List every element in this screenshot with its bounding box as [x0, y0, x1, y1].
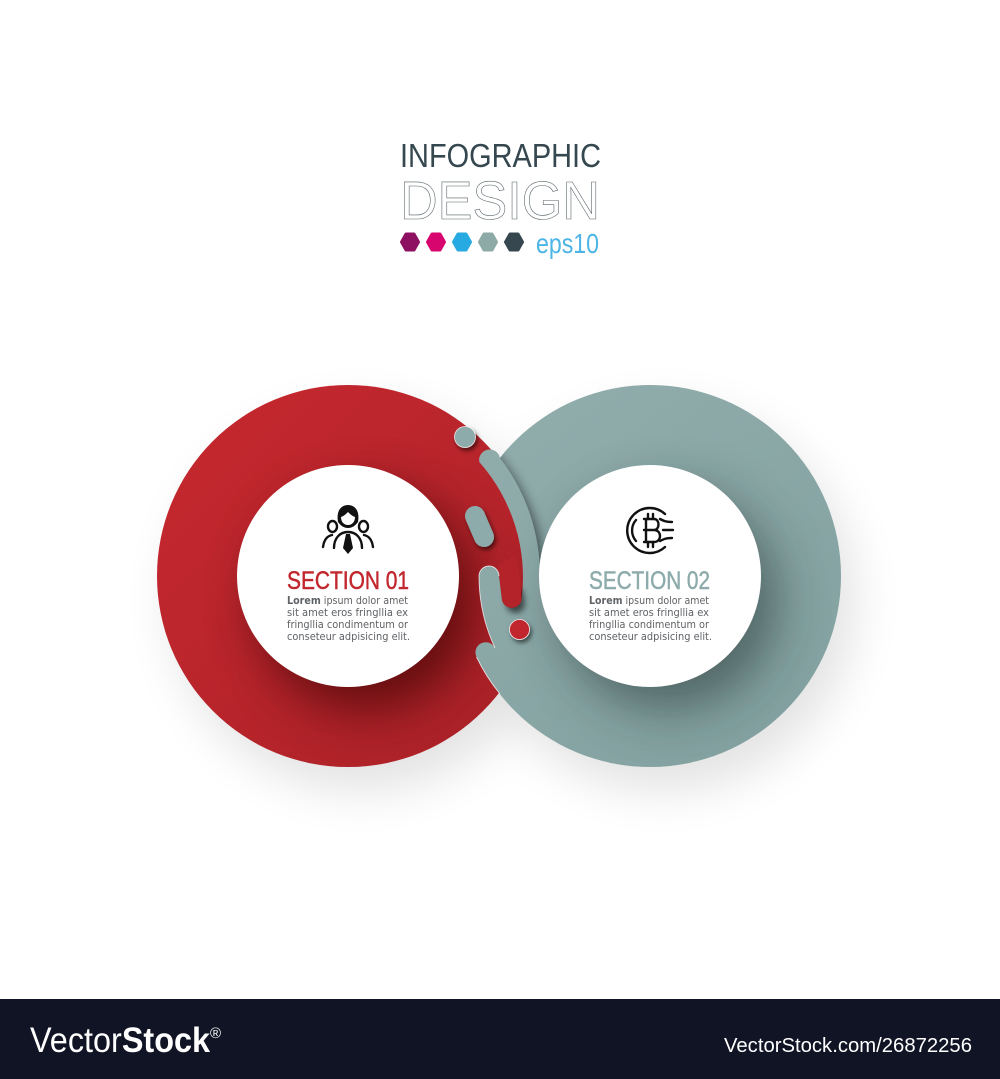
connector dot: grey: [454, 426, 476, 448]
body text: Lorem ipsum dolor amet: [287, 595, 408, 607]
body text: sit amet eros fringllia ex: [287, 607, 408, 619]
red finger shadow: [505, 590, 525, 613]
body text: [287, 595, 410, 643]
panel: grey ring: [500, 385, 841, 767]
connector pill: grey: [475, 516, 484, 537]
heading: design: DESIGN: [400, 171, 600, 231]
icon: bitcoin: [627, 508, 673, 553]
red finger: [498, 555, 522, 608]
eps label: eps10: [536, 228, 599, 259]
panel: section 01: [237, 465, 459, 687]
body text: conseteur adpisicing elit.: [287, 631, 410, 643]
inner white disc: [237, 465, 459, 687]
footer id: VectorStock.com/26872256: [724, 1035, 972, 1057]
body text: fringllia condimentum or: [589, 619, 710, 631]
connector dot: red: [510, 620, 530, 640]
connector highlight: [476, 566, 500, 694]
section heading: SECTION 02: [589, 567, 710, 595]
grey connector band and fingers: [475, 449, 540, 695]
body text: conseteur adpisicing elit.: [589, 631, 712, 643]
panel: red ring: [157, 385, 539, 767]
heading: infographic: INFOGRAPHIC: [400, 137, 601, 174]
body text: [589, 595, 712, 643]
body text: Lorem ipsum dolor amet: [589, 595, 709, 607]
body text: sit amet eros fringllia ex: [589, 607, 709, 619]
body text: fringllia condimentum or: [287, 619, 409, 631]
title: [400, 137, 601, 259]
section heading: SECTION 01: [287, 567, 409, 595]
footer bar: [0, 999, 1000, 1079]
inner white disc: [539, 465, 761, 687]
registered mark: ®: [210, 1025, 221, 1042]
colour hexagons: [402, 234, 522, 250]
icon: team: [323, 505, 373, 554]
panel: section 02: [539, 465, 761, 687]
ground shadow: [171, 409, 855, 791]
footer logo: VectorStock: [30, 1021, 210, 1060]
grey disc shadow: [557, 489, 779, 711]
